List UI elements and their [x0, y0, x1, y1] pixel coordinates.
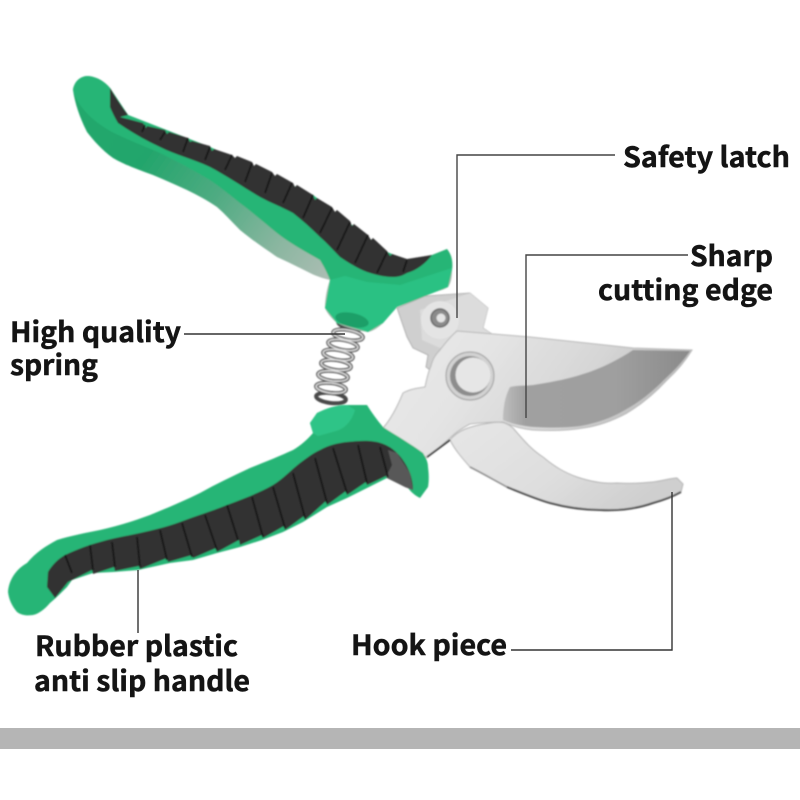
callout: hook piece	[351, 492, 672, 664]
upper grip ridges	[142, 125, 407, 273]
upper handle collar	[325, 268, 452, 332]
pruning shears illustration	[8, 76, 692, 615]
icon: spring	[316, 317, 367, 405]
callout: sharp cutting edge: cutting edge	[598, 269, 773, 309]
lower rubber grip	[47, 441, 413, 598]
upper handle outer green	[73, 76, 452, 332]
bottom grey band	[0, 728, 800, 749]
lower handle outer green	[8, 405, 429, 615]
upper handle	[73, 76, 452, 332]
pivot bolt	[446, 352, 494, 400]
upper handle bright band	[73, 76, 452, 332]
lower grip ridges	[65, 445, 388, 573]
callout: rubber plastic anti slip handle: anti slip handle	[34, 660, 250, 700]
callout: sharp cutting edge	[526, 235, 773, 418]
callout: rubber plastic anti slip handle	[34, 570, 250, 700]
lower blade: hook piece	[450, 422, 683, 510]
callout: safety latch: Safety latch	[623, 136, 790, 176]
callout: high quality spring: spring	[10, 344, 98, 384]
lower handle collar	[310, 405, 355, 436]
blade junction dark line	[427, 440, 450, 457]
upper rubber grip	[110, 88, 432, 277]
callout: rubber plastic anti slip handle: Rubber plastic	[35, 625, 238, 665]
upper blade body	[383, 331, 692, 458]
lower grip right shading	[386, 450, 413, 490]
rear plate and safety latch	[397, 293, 492, 370]
hook blade lower edge	[470, 467, 507, 487]
hook blade dark edge	[507, 487, 681, 510]
lower handle	[8, 405, 429, 615]
callout: sharp cutting edge: Sharp	[690, 235, 773, 275]
cutting bevel	[503, 350, 690, 428]
spring socket	[334, 310, 370, 330]
callout: high quality spring	[10, 311, 345, 384]
callout: high quality spring: High quality	[10, 311, 181, 351]
callout: hook piece: Hook piece	[351, 624, 507, 664]
callout: safety latch	[457, 136, 790, 318]
